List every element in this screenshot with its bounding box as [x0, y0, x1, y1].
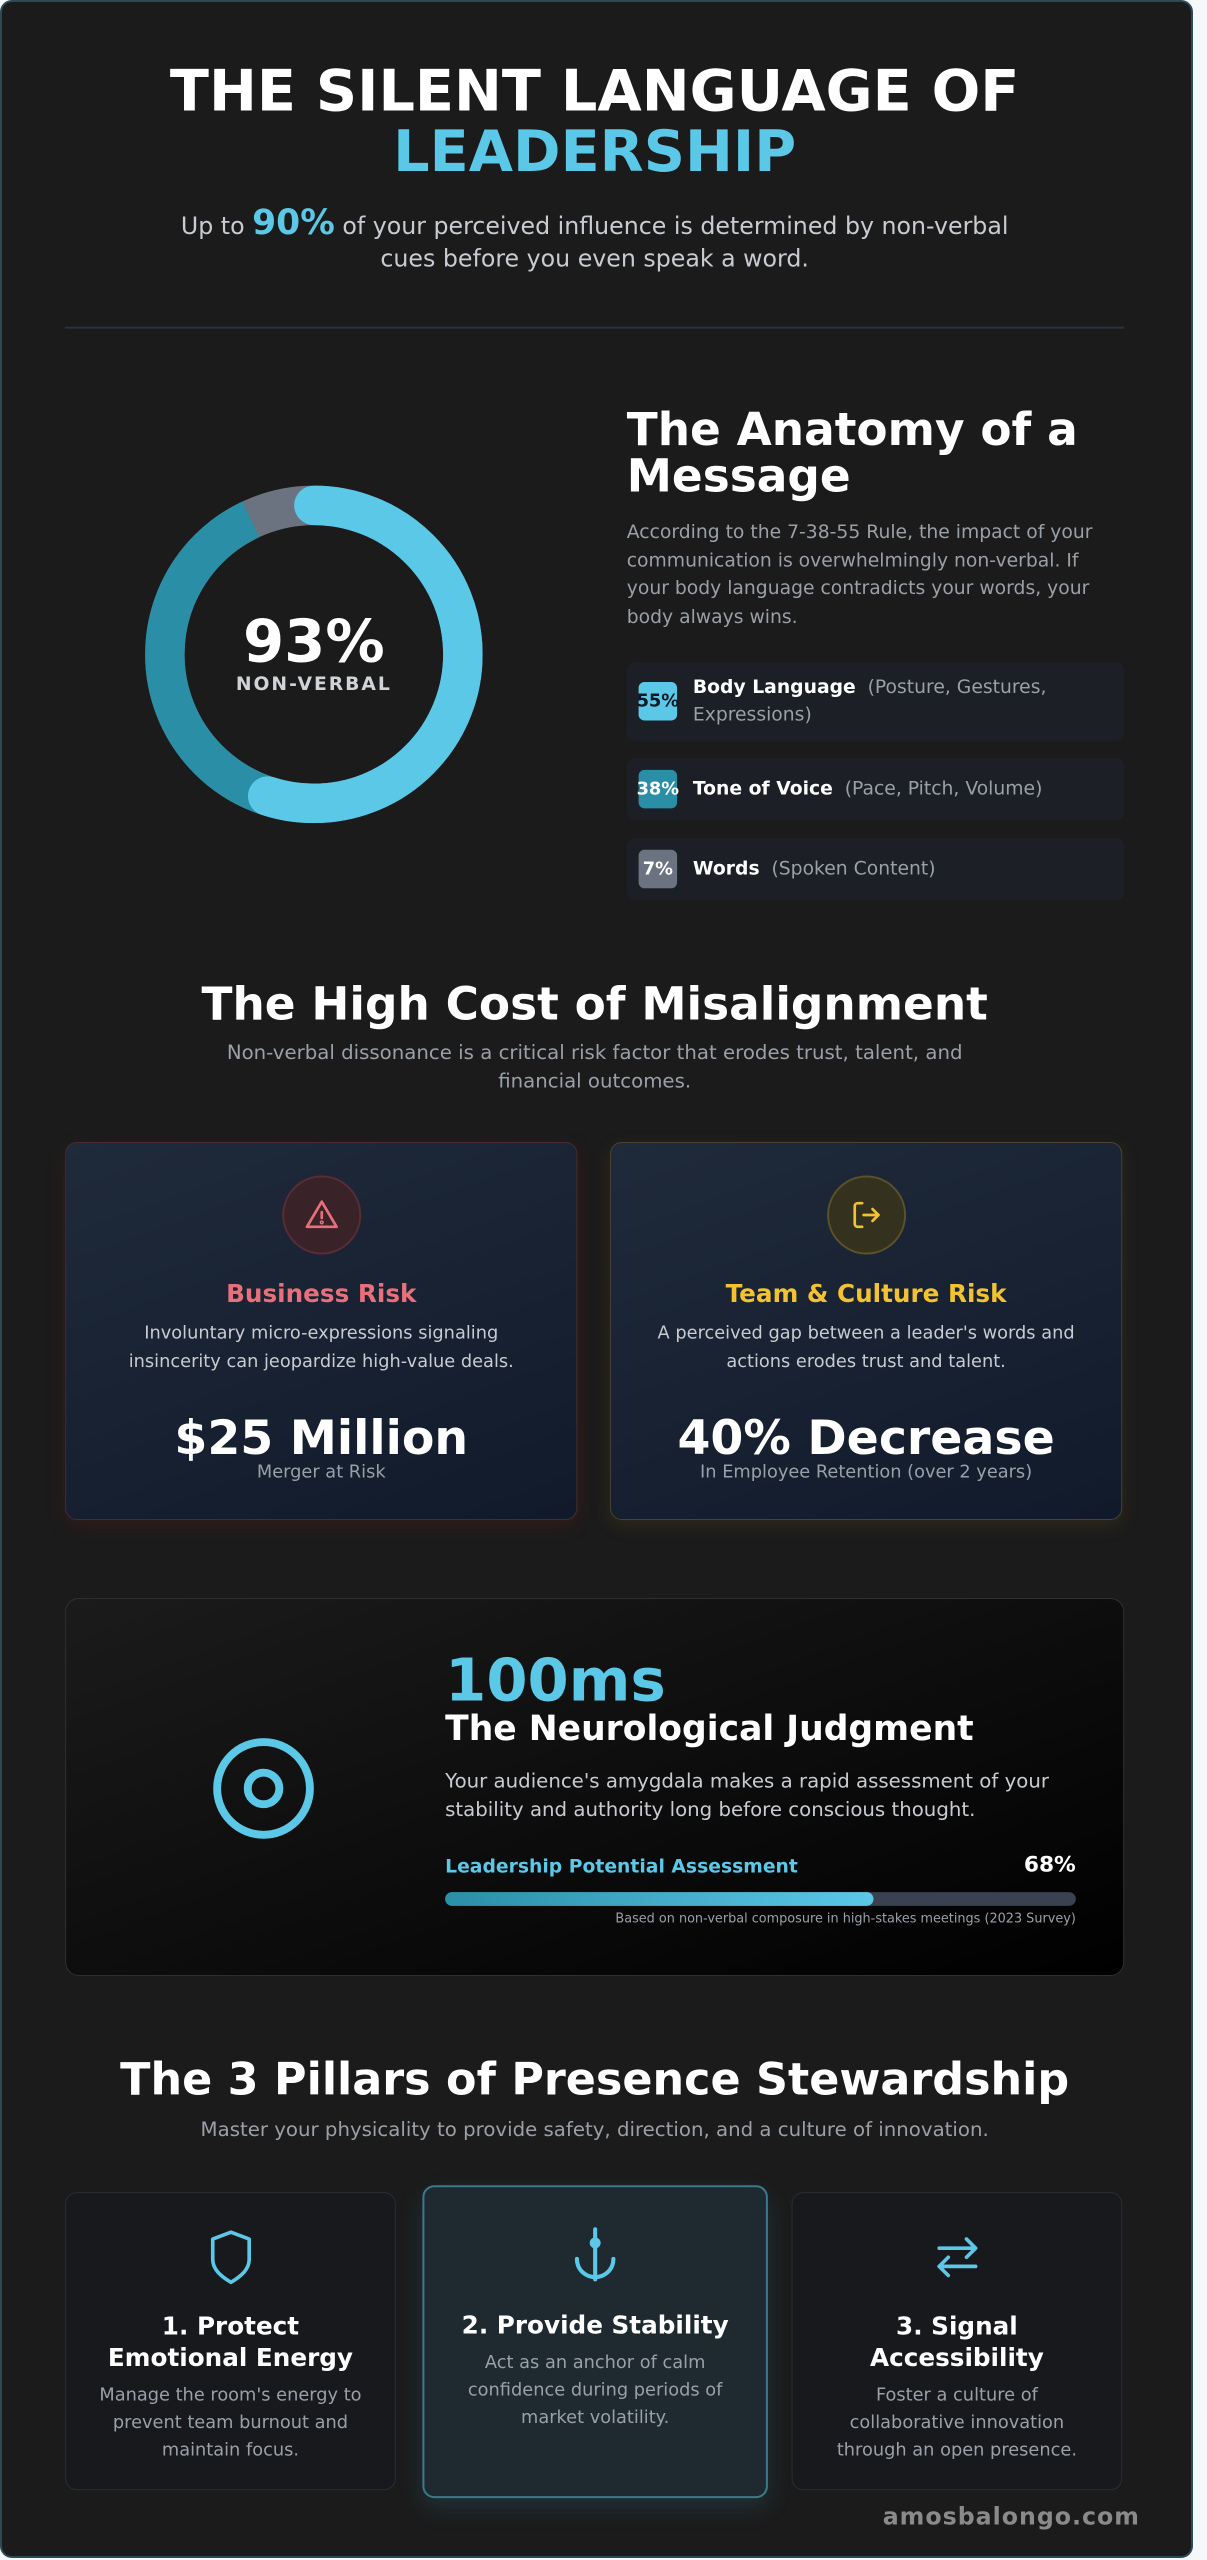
title [170, 57, 1019, 185]
panel: neurological judgment: Your audience's amygdala makes a rapid assessment of your stability and authority long before conscious thought. [445, 1769, 1049, 1821]
icon: shield [210, 2230, 251, 2284]
pillars subtitle: Master your physicality to provide safety, direction, and a culture of innovation. [201, 2117, 989, 2141]
icon: arrows [937, 2237, 978, 2278]
title: THE SILENT LANGUAGE OF [170, 57, 1019, 124]
pillar 2: Act as an anchor of calm confidence during periods of market volatility. [468, 2352, 722, 2428]
heading: pillars: The 3 Pillars of Presence Stewardship [120, 2053, 1069, 2105]
donut chart [145, 486, 483, 824]
panel: business risk: $25 Million [174, 1410, 468, 1466]
heading: anatomy [626, 403, 1078, 502]
progress bar: Leadership Potential Assessment [445, 1856, 798, 1877]
item: body language: Body Language (Posture, Gestures, Expressions) [693, 676, 1046, 725]
title: LEADERSHIP [393, 117, 796, 185]
panel: neurological judgment: The Neurological Judgment [445, 1709, 974, 1749]
pillar 1 [65, 2192, 396, 2490]
progress bar: 68% [1024, 1853, 1076, 1877]
item: words [627, 838, 1124, 900]
panel: business risk: Merger at Risk [257, 1462, 386, 1482]
pillar 1: Manage the room's energy to prevent team burnout and maintain focus. [99, 2385, 362, 2461]
pillar 3 [792, 2192, 1122, 2490]
pillar 3: Foster a culture of collaborative innovation through an open presence. [837, 2385, 1077, 2461]
pillar 2: 2. Provide Stability [462, 2311, 729, 2339]
pillar 2 [422, 2185, 768, 2498]
item: words: 7% [643, 859, 673, 879]
progress bar: Based on non-verbal composure in high-stakes meetings (2023 Survey) [615, 1912, 1076, 1927]
panel: team risk [610, 1142, 1122, 1520]
item: words: Words (Spoken Content) [693, 858, 936, 879]
heading: misalignment: The High Cost of Misalignment [201, 977, 988, 1030]
panel: business risk: Business Risk [226, 1279, 416, 1308]
donut chart: 93% [243, 606, 385, 675]
pillar 3: Accessibility [870, 2343, 1044, 2372]
footer: amosbalongo.com [883, 2503, 1140, 2531]
item: tone [627, 758, 1124, 820]
panel: team risk: In Employee Retention (over 2 years) [700, 1462, 1032, 1482]
item: body language [627, 662, 1124, 741]
panel: neurological judgment [65, 1598, 1124, 1976]
donut chart: NON-VERBAL [236, 674, 392, 695]
pillar 1: Emotional Energy [108, 2343, 353, 2372]
icon: target [213, 1738, 314, 1839]
misalignment subtitle: Non-verbal dissonance is a critical risk factor that erodes trust, talent, and financial outcomes. [227, 1040, 963, 1093]
panel: neurological judgment: 100ms [445, 1646, 666, 1715]
anatomy text: According to the 7-38-55 Rule, the impact of your communication is overwhelmingly non-verbal. If your body language contradicts your words, your body always wins. [627, 521, 1092, 627]
item: body language: 55% [637, 691, 679, 712]
progress bar [445, 1853, 1076, 1927]
panel: business risk [65, 1142, 577, 1520]
heading: anatomy: The Anatomy of a [627, 403, 1078, 456]
panel: team risk: Team & Culture Risk [726, 1279, 1007, 1308]
icon: anchor [574, 2227, 616, 2282]
panel: team risk: A perceived gap between a leader's words and actions erodes trust and talent. [658, 1323, 1075, 1372]
panel: team risk: 40% Decrease [677, 1410, 1055, 1466]
pillar 3: 3. Signal [896, 2312, 1018, 2340]
subtitle: Up to 90% of your perceived influence is determined by non-verbal cues before you even speak a word. [181, 203, 1008, 272]
item: tone: Tone of Voice (Pace, Pitch, Volume) [693, 778, 1042, 799]
icon: exit [827, 1176, 906, 1254]
pillar 1: 1. Protect [162, 2312, 299, 2340]
item: tone: 38% [637, 779, 679, 799]
panel: business risk: Involuntary micro-expressions signaling insincerity can jeopardize high-value deals. [129, 1323, 514, 1372]
heading: anatomy: Message [627, 449, 851, 502]
icon: warning [282, 1176, 361, 1254]
